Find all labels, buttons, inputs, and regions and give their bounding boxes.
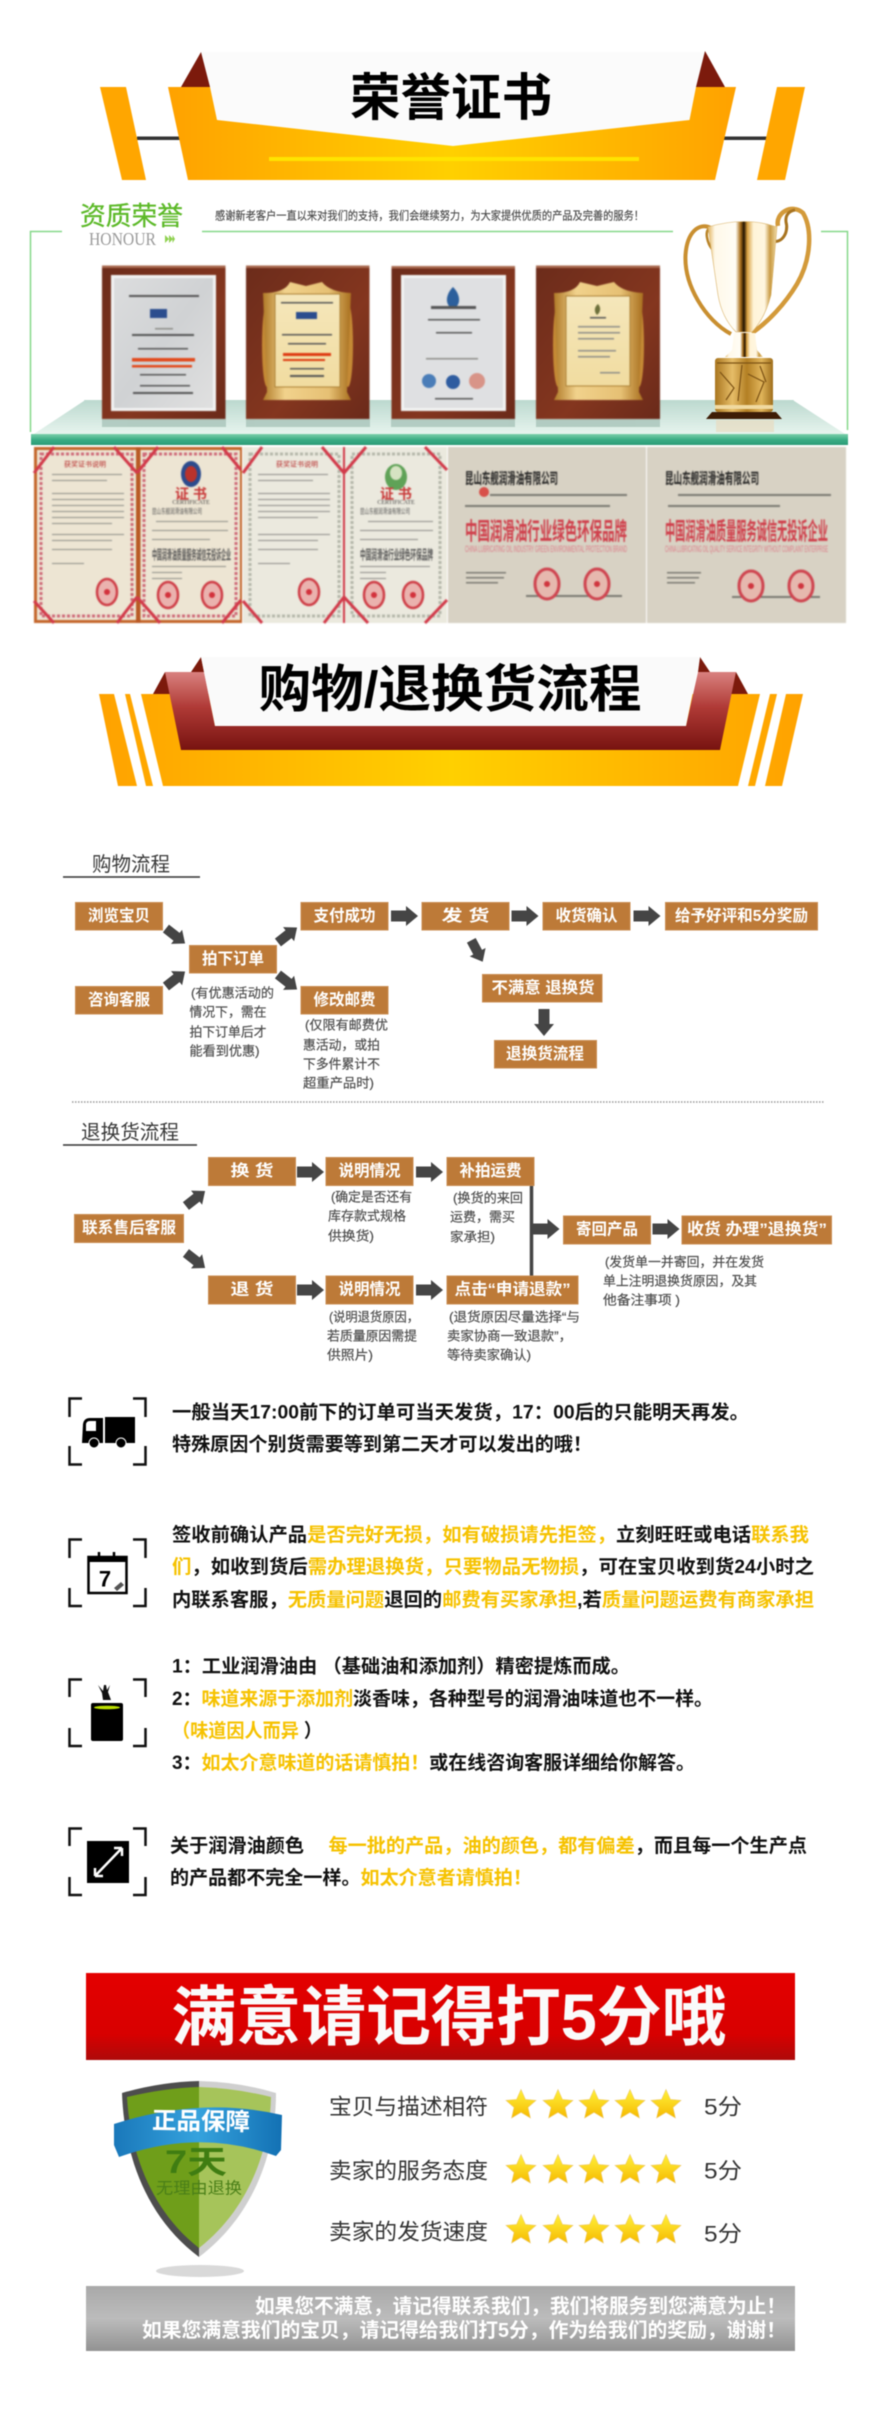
arrow: send back to receive (652, 1219, 680, 1239)
banner gold base (99, 694, 803, 786)
arrow: unsatisfied to return flow (534, 1009, 554, 1036)
banner: honor certificates (100, 51, 805, 180)
step: review (666, 902, 818, 930)
rating row: service attitude (329, 2154, 742, 2184)
rating row: description match: 宝贝与描述相符 (329, 2094, 488, 2120)
banner slogan: 满意请记得打5分哦 (172, 1980, 726, 2054)
connector line (530, 1186, 533, 1277)
caption: freight note: (换货的来回 (453, 1190, 523, 1206)
caption: return reason note: 供照片) (327, 1348, 373, 1362)
glass shelf (31, 400, 848, 445)
stars (506, 2090, 681, 2118)
step: contact service: 联系售后客服 (82, 1218, 176, 1237)
step: return goods: 退 货 (230, 1280, 274, 1298)
banner: shopping and return flow (99, 657, 803, 786)
step: send back: 寄回产品 (576, 1220, 638, 1238)
banner title: 荣誉证书 (350, 70, 552, 126)
panel: qualification honors shelf (30, 201, 848, 445)
text: colour line one: 关于润滑油颜色 每一批的产品，油的颜色，都有偏差，而且每一个生产点 (170, 1834, 807, 1856)
step: apply for refund (447, 1276, 578, 1304)
green frame lines (30, 232, 848, 432)
certificate 2: green environmental certificate: 中国润滑油行业绿色环保品牌 (360, 548, 433, 562)
caption: stock note: 库存款式规格 (328, 1208, 406, 1224)
arrow: ship to confirm (512, 906, 538, 926)
arrow: return to explain (297, 1280, 324, 1300)
shield shape (122, 2081, 276, 2257)
caption: postage note: 超重产品时) (303, 1076, 374, 1090)
step: pay shipping: 补拍运费 (460, 1162, 522, 1180)
caption: stock note (328, 1190, 412, 1244)
text: colour line two: 的产品都不完全一样。如太介意者请慎拍！ (170, 1866, 532, 1888)
arrow: payment to ship (391, 906, 418, 926)
plaque 4: gold certificate (536, 266, 660, 419)
step: explain situation (326, 1158, 413, 1186)
text: special cases: 特殊原因个别货需要等到第二天才可以发出的哦！ (172, 1432, 592, 1456)
arrow: service to return (180, 1246, 211, 1275)
text: line one: 签收前确认产品是否完好无损，如有破损请先拒签， 立刻旺旺或电话联系我 (172, 1522, 809, 1546)
banner connecting bars (137, 136, 767, 140)
step: place order: 拍下订单 (202, 950, 264, 968)
caption: postage note: (仅限有邮费优 (305, 1018, 388, 1032)
message line two: 如果您满意我们的宝贝，请记得给我们打5分，作为给我们的奖励，谢谢！ (142, 2318, 786, 2342)
caption: invoice note: 他备注事项 ) (603, 1292, 680, 1308)
caption: refund reason note: 卖家协商一致退款”， (447, 1328, 572, 1344)
notice: shipping time (70, 1398, 749, 1464)
step: change postage: 修改邮费 (314, 991, 376, 1009)
caption: freight note: 运费，需买 (450, 1210, 515, 1224)
heading: return flow: 退换货流程 (81, 1121, 179, 1144)
step: return goods (208, 1276, 296, 1304)
caption: return reason note (327, 1310, 419, 1362)
step: review: 给予好评和5分奖励 (675, 906, 808, 925)
step: change postage (301, 986, 388, 1014)
certificate photo row: 中国润滑油质量服务诚信无投诉企业 (152, 548, 231, 562)
ribbon text: 正品保障 (152, 2108, 250, 2136)
arrow: ship to unsatisfied (463, 936, 491, 966)
thanks text: 感谢新老客户一直以来对我们的支持，我们会继续努力，为大家提供优质的产品及完善的服务！ (215, 208, 644, 222)
text: same day shipping: 一般当天17:00前下的订单可当天发货，17：00后的只能明天再发。 (172, 1400, 749, 1424)
step: unsatisfied return: 不满意 退换货 (492, 978, 594, 997)
step: confirm receipt: 收货确认 (556, 906, 618, 925)
plaque 3: quality certificate (392, 266, 515, 419)
text: item one: 1：工业润滑油由 （基础油和添加剂）精密提炼而成。 (172, 1654, 630, 1678)
score: 5分 (704, 2222, 742, 2246)
certificate 1: red service certificate: CERTIFICATE (172, 500, 210, 506)
chart: shopping flow (63, 853, 818, 1090)
arrow: confirm to review (634, 906, 660, 926)
banner left flag (100, 87, 146, 180)
arrow: order to payment (272, 920, 303, 950)
notice: smell of lubricant (70, 1654, 713, 1774)
icon: small green chevrons (165, 235, 175, 243)
step: consult: 咨询客服 (88, 990, 150, 1009)
certificate 3: green brand plaque: 中国润滑油行业绿色环保品牌 (465, 518, 627, 546)
text: line two: 们，如收到货后需办理退换货，只要物品无物损 ，可在宝贝收到货24小时之 (172, 1554, 814, 1578)
arrow: explain to refund (416, 1280, 443, 1300)
certificate 2: green environmental certificate (243, 447, 447, 623)
step: contact service (74, 1214, 184, 1242)
icon: oil bottle and fly (70, 1680, 146, 1746)
caption: order note: 能看到优惠) (190, 1044, 260, 1058)
caption: invoice note: 单上注明退换货原因，及其 (603, 1274, 757, 1288)
step: consult (76, 986, 162, 1014)
caption: postage note: 惠活动，或拍 (303, 1038, 380, 1052)
caption: postage note (303, 1018, 388, 1090)
caption: order note (190, 986, 274, 1058)
icon: calendar seven: 7 (99, 1566, 111, 1592)
step: return flow (494, 1040, 596, 1068)
arrow: exchange to explain (297, 1162, 324, 1182)
step: ship (422, 902, 509, 930)
step: explain situation (326, 1276, 413, 1304)
step: pay shipping (447, 1158, 534, 1186)
message line one: 如果您不满意，请记得联系我们，我们将服务到您满意为止！ (255, 2294, 786, 2318)
certificate 3: green brand plaque (448, 447, 646, 623)
ribbon (114, 2107, 282, 2157)
certificate 1: red service certificate: 获奖证书说明 (64, 460, 106, 468)
plaque 1: silver certificate (102, 266, 226, 419)
certificate 2: green environmental certificate: 获奖证书说明 (276, 460, 318, 468)
banner red ribbon (165, 672, 736, 750)
notice: check on receipt (70, 1522, 814, 1610)
rating row: description match (329, 2090, 742, 2120)
banner right dark fold (696, 51, 725, 87)
step: unsatisfied return (482, 974, 602, 1002)
caption: refund reason note: 等待卖家确认) (447, 1348, 531, 1362)
icon: calendar seven (70, 1540, 146, 1606)
score: 5分 (704, 2094, 742, 2120)
caption: postage note: 下多件累计不 (303, 1056, 380, 1072)
step: receive and process: 收货 办理”退换货” (687, 1220, 827, 1238)
caption: return reason note: 若质量原因需提 (327, 1328, 417, 1344)
step: send back (564, 1216, 650, 1244)
heading: shopping flow: 购物流程 (92, 853, 170, 876)
step: explain situation: 说明情况 (338, 1161, 400, 1180)
arrow: order to postage (272, 967, 303, 997)
step: explain situation: 说明情况 (338, 1280, 400, 1298)
step: payment (301, 902, 388, 930)
score: 5分 (704, 2158, 742, 2184)
stars (506, 2154, 681, 2183)
caption: order note: 拍下订单后才 (190, 1024, 266, 1040)
caption: refund reason note: (退货原因尽量选择“与 (449, 1310, 580, 1324)
banner gold ribbon (168, 87, 736, 180)
certificate 4: service integrity plaque (647, 447, 846, 623)
heading: HONOUR: HONOUR (89, 229, 156, 249)
badge: genuine guarantee shield (114, 2081, 282, 2277)
step: receive and process (682, 1216, 832, 1244)
caption: stock note: (确定是否还有 (331, 1190, 412, 1204)
step: payment: 支付成功 (314, 906, 376, 925)
certificate 1: red service certificate: 昆山东舰润滑油有限公司 (152, 506, 202, 516)
caption: invoice note (603, 1254, 764, 1308)
arrow: browse to order (160, 921, 191, 951)
step: browse: 浏览宝贝 (88, 906, 150, 925)
banner: rate five stars (86, 1973, 795, 2060)
certificate 2: green environmental certificate: 昆山东舰润滑油有限公司 (360, 506, 410, 516)
icon: golden trophy (685, 209, 809, 432)
certificate 2: green environmental certificate: 证 书 (380, 486, 412, 502)
rating row: service attitude: 卖家的服务态度 (329, 2158, 488, 2184)
certificate photo row (34, 447, 846, 623)
icon: truck (70, 1398, 146, 1464)
text: item three: 3：如太介意味道的话请慎拍！或在线咨询客服详细给你解答。 (172, 1750, 695, 1774)
no reason return: 无理由退换 (156, 2180, 242, 2198)
step: place order (190, 946, 276, 973)
step: browse (76, 902, 162, 930)
caption: freight note: 家承担) (450, 1230, 495, 1244)
step: exchange (208, 1158, 296, 1186)
banner white panel (201, 52, 705, 147)
banner white stripes (114, 694, 786, 786)
caption: freight note (450, 1190, 523, 1244)
caption: stock note: 供换货) (328, 1228, 374, 1244)
banner highlight line (269, 157, 639, 161)
arrow: explain to pay shipping (416, 1162, 443, 1182)
shadow (156, 2265, 244, 2277)
plaque 2: gold certificate (246, 266, 370, 419)
step: apply for refund: 点击“申请退款” (454, 1280, 570, 1298)
banner left dark fold (181, 52, 210, 87)
step: ship: 发 货 (442, 906, 490, 925)
certificate 3: green brand plaque: 昆山东舰润滑油有限公司 (465, 470, 558, 488)
arrow: line to send back (532, 1219, 560, 1239)
step: exchange: 换 货 (230, 1161, 274, 1180)
caption: invoice note: (发货单一并寄回，并在发货 (605, 1254, 764, 1270)
icon: resize arrow (70, 1828, 146, 1895)
chart: return flow (63, 1121, 832, 1362)
banner dark folds (153, 657, 748, 694)
arrow: consult to order (160, 964, 191, 994)
seven days: 7天 (165, 2144, 227, 2180)
heading: qualification honors: 资质荣誉 (80, 201, 183, 231)
caption: order note: 情况下，需在 (190, 1004, 266, 1020)
certificate photo row: CHINA LUBRICATING OIL INDUSTRY GREEN ENVIRONMENTAL PROTECTION BRAND (465, 544, 627, 554)
arrow: service to exchange (180, 1184, 211, 1213)
caption: order note: (有优惠活动的 (191, 986, 274, 1000)
text: line three: 内联系客服，无质量问题退回的邮费有买家承担,若质量问题运费有商家承担 (172, 1588, 814, 1610)
footer message bar (86, 2286, 795, 2351)
caption: refund reason note (447, 1310, 580, 1362)
banner title: 购物/退换货流程 (258, 661, 642, 718)
step: return flow: 退换货流程 (506, 1044, 584, 1063)
caption: return reason note: (说明退货原因， (329, 1310, 419, 1324)
step: confirm receipt (543, 902, 630, 930)
rating row: shipping speed: 卖家的发货速度 (329, 2220, 488, 2244)
text: item two note: （味道因人而异 ） (172, 1718, 322, 1742)
notice: oil colour (70, 1828, 807, 1895)
text: item two: 2：味道来源于添加剂淡香味，各种型号的润滑油味道也不一样。 (172, 1686, 713, 1710)
stars (506, 2214, 681, 2243)
certificate 1: red service certificate (34, 447, 242, 623)
banner white panel (201, 657, 700, 726)
certificate 4: service integrity plaque: 昆山东舰润滑油有限公司 (665, 470, 759, 488)
certificate 2: green environmental certificate: CERTIFICATE (377, 500, 415, 506)
certificate 1: red service certificate: 证 书 (175, 486, 207, 502)
banner right flag (757, 87, 805, 180)
rating row: shipping speed (329, 2214, 742, 2246)
